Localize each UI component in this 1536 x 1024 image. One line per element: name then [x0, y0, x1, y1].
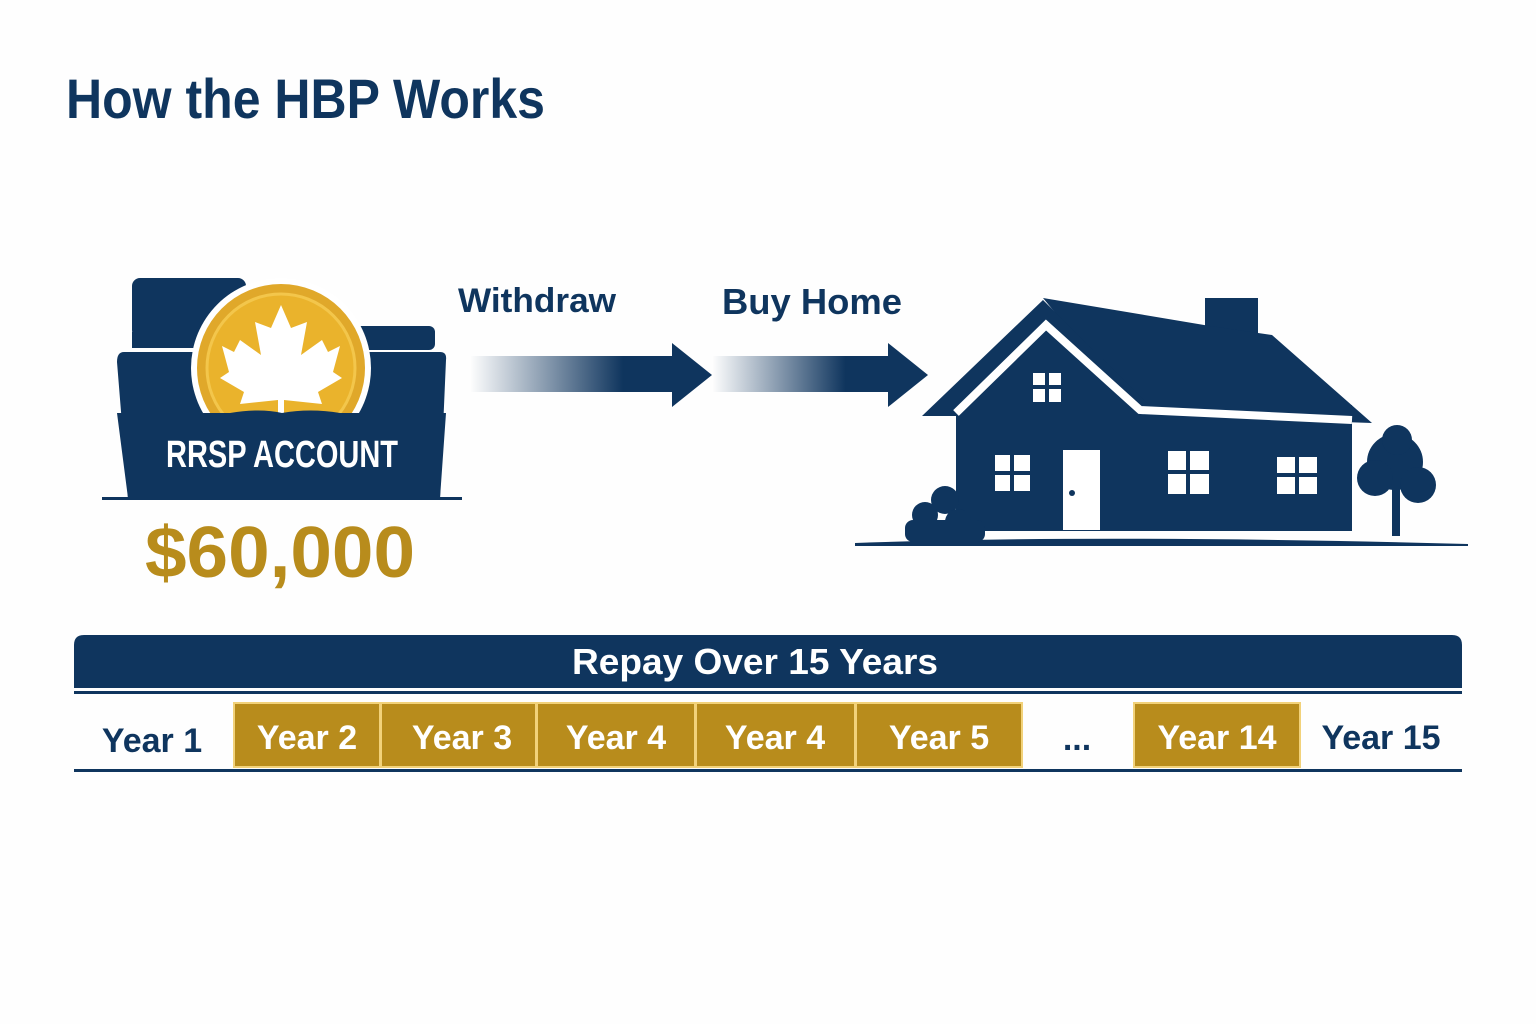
timeline: years	[102, 703, 1441, 767]
icon: RRSP folder with coin: RRSP ACCOUNT	[166, 434, 398, 476]
amount: $60,000	[145, 513, 415, 593]
timeline: years: Year 4	[725, 719, 825, 757]
banner: repay over 15 years	[74, 635, 1462, 688]
banner: repay over 15 years: Repay Over 15 Years	[572, 641, 938, 682]
timeline: years: ...	[1063, 720, 1091, 758]
timeline: years: Year 4	[566, 719, 666, 757]
timeline: years: Year 14	[1157, 719, 1277, 757]
label: withdraw: Withdraw	[458, 282, 617, 320]
icon: coin	[191, 278, 371, 458]
timeline: years: Year 3	[412, 719, 512, 757]
timeline: years: Year 2	[257, 719, 357, 757]
timeline: years: Year 1	[102, 722, 202, 760]
title: How the HBP Works	[66, 67, 545, 130]
arrow: withdraw	[470, 343, 712, 407]
arrow: buy home	[712, 343, 928, 407]
label: buy home: Buy Home	[722, 281, 902, 322]
timeline: years: Year 5	[889, 719, 989, 757]
icon: RRSP folder with coin	[102, 278, 462, 500]
timeline: years: Year 15	[1321, 719, 1441, 757]
icon: house	[855, 298, 1468, 546]
